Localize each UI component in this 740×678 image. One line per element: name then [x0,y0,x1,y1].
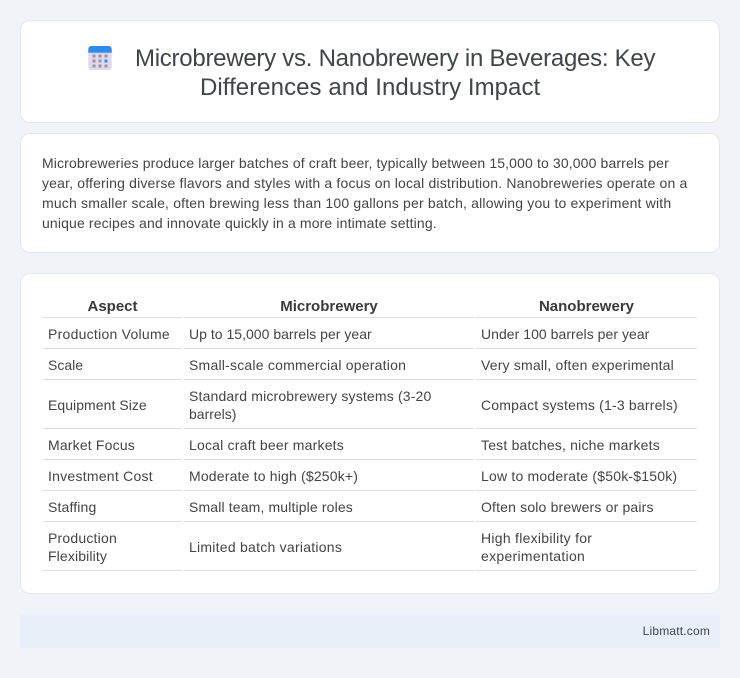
title: Microbrewery vs. Nanobrewery in Beverages: Key [135,45,655,72]
row: Production Volume: Production Volume [48,326,170,342]
panel: comparison table [20,273,720,594]
table header: Nanobrewery: Nanobrewery [539,298,634,315]
intro text [42,155,688,231]
title: Differences and Industry Impact [200,74,540,101]
row: Market Focus: Test batches, niche markets [481,437,660,453]
row: Scale: Small-scale commercial operation [189,357,406,373]
icon: calendar [88,46,112,70]
row: Staffing [48,499,654,515]
row: Production Volume [48,326,650,342]
table header: Aspect: Aspect [87,298,138,315]
row: Equipment Size [48,388,678,422]
intro text: Microbreweries produce larger batches of craft beer, typically between 15,000 to 30,000 barrels per [42,155,669,171]
row: Investment Cost: Low to moderate ($50k-$150k) [481,468,677,484]
row: Investment Cost: Moderate to high ($250k+) [189,468,358,484]
footer bar [20,614,720,648]
row: Equipment Size: Compact systems (1-3 barrels) [481,397,678,413]
footer text: Libmatt.com [643,624,710,638]
table header: Microbrewery: Microbrewery [280,298,378,315]
row: Staffing: Often solo brewers or pairs [481,499,654,515]
row: Production Flexibility: High flexibility for [481,530,592,546]
row: Staffing: Small team, multiple roles [189,499,353,515]
row: Equipment Size: barrels) [189,406,236,422]
row: Production Flexibility: Production [48,530,117,546]
row: Investment Cost [48,468,677,484]
row: Staffing: Staffing [48,499,96,515]
panel: intro card [20,133,720,253]
intro text: unique recipes and innovate quickly in a more intimate setting. [42,215,437,231]
row: Scale: Very small, often experimental [481,357,674,373]
row: Production Volume: Up to 15,000 barrels per year [189,326,372,342]
row: Production Flexibility [48,530,592,564]
row: Market Focus [48,437,660,453]
row: Investment Cost: Investment Cost [48,468,153,484]
panel: title card [20,20,720,123]
intro text: year, offering diverse flavors and styles with a focus on local distribution. Nanobreweries operate on a [42,175,687,191]
row: Scale: Scale [48,357,83,373]
row: Equipment Size: Equipment Size [48,397,147,413]
row: Production Flexibility: Flexibility [48,548,107,564]
row: Production Volume: Under 100 barrels per year [481,326,649,342]
row: Market Focus: Market Focus [48,437,135,453]
row: Production Flexibility: Limited batch variations [189,539,342,555]
intro text: much smaller scale, often brewing less than 100 gallons per batch, allowing you to experiment with [42,195,671,211]
row: Market Focus: Local craft beer markets [189,437,344,453]
title [135,45,656,101]
row: Equipment Size: Standard microbrewery systems (3-20 [189,388,431,404]
row: Scale [48,357,674,373]
row: Production Flexibility: experimentation [481,548,585,564]
